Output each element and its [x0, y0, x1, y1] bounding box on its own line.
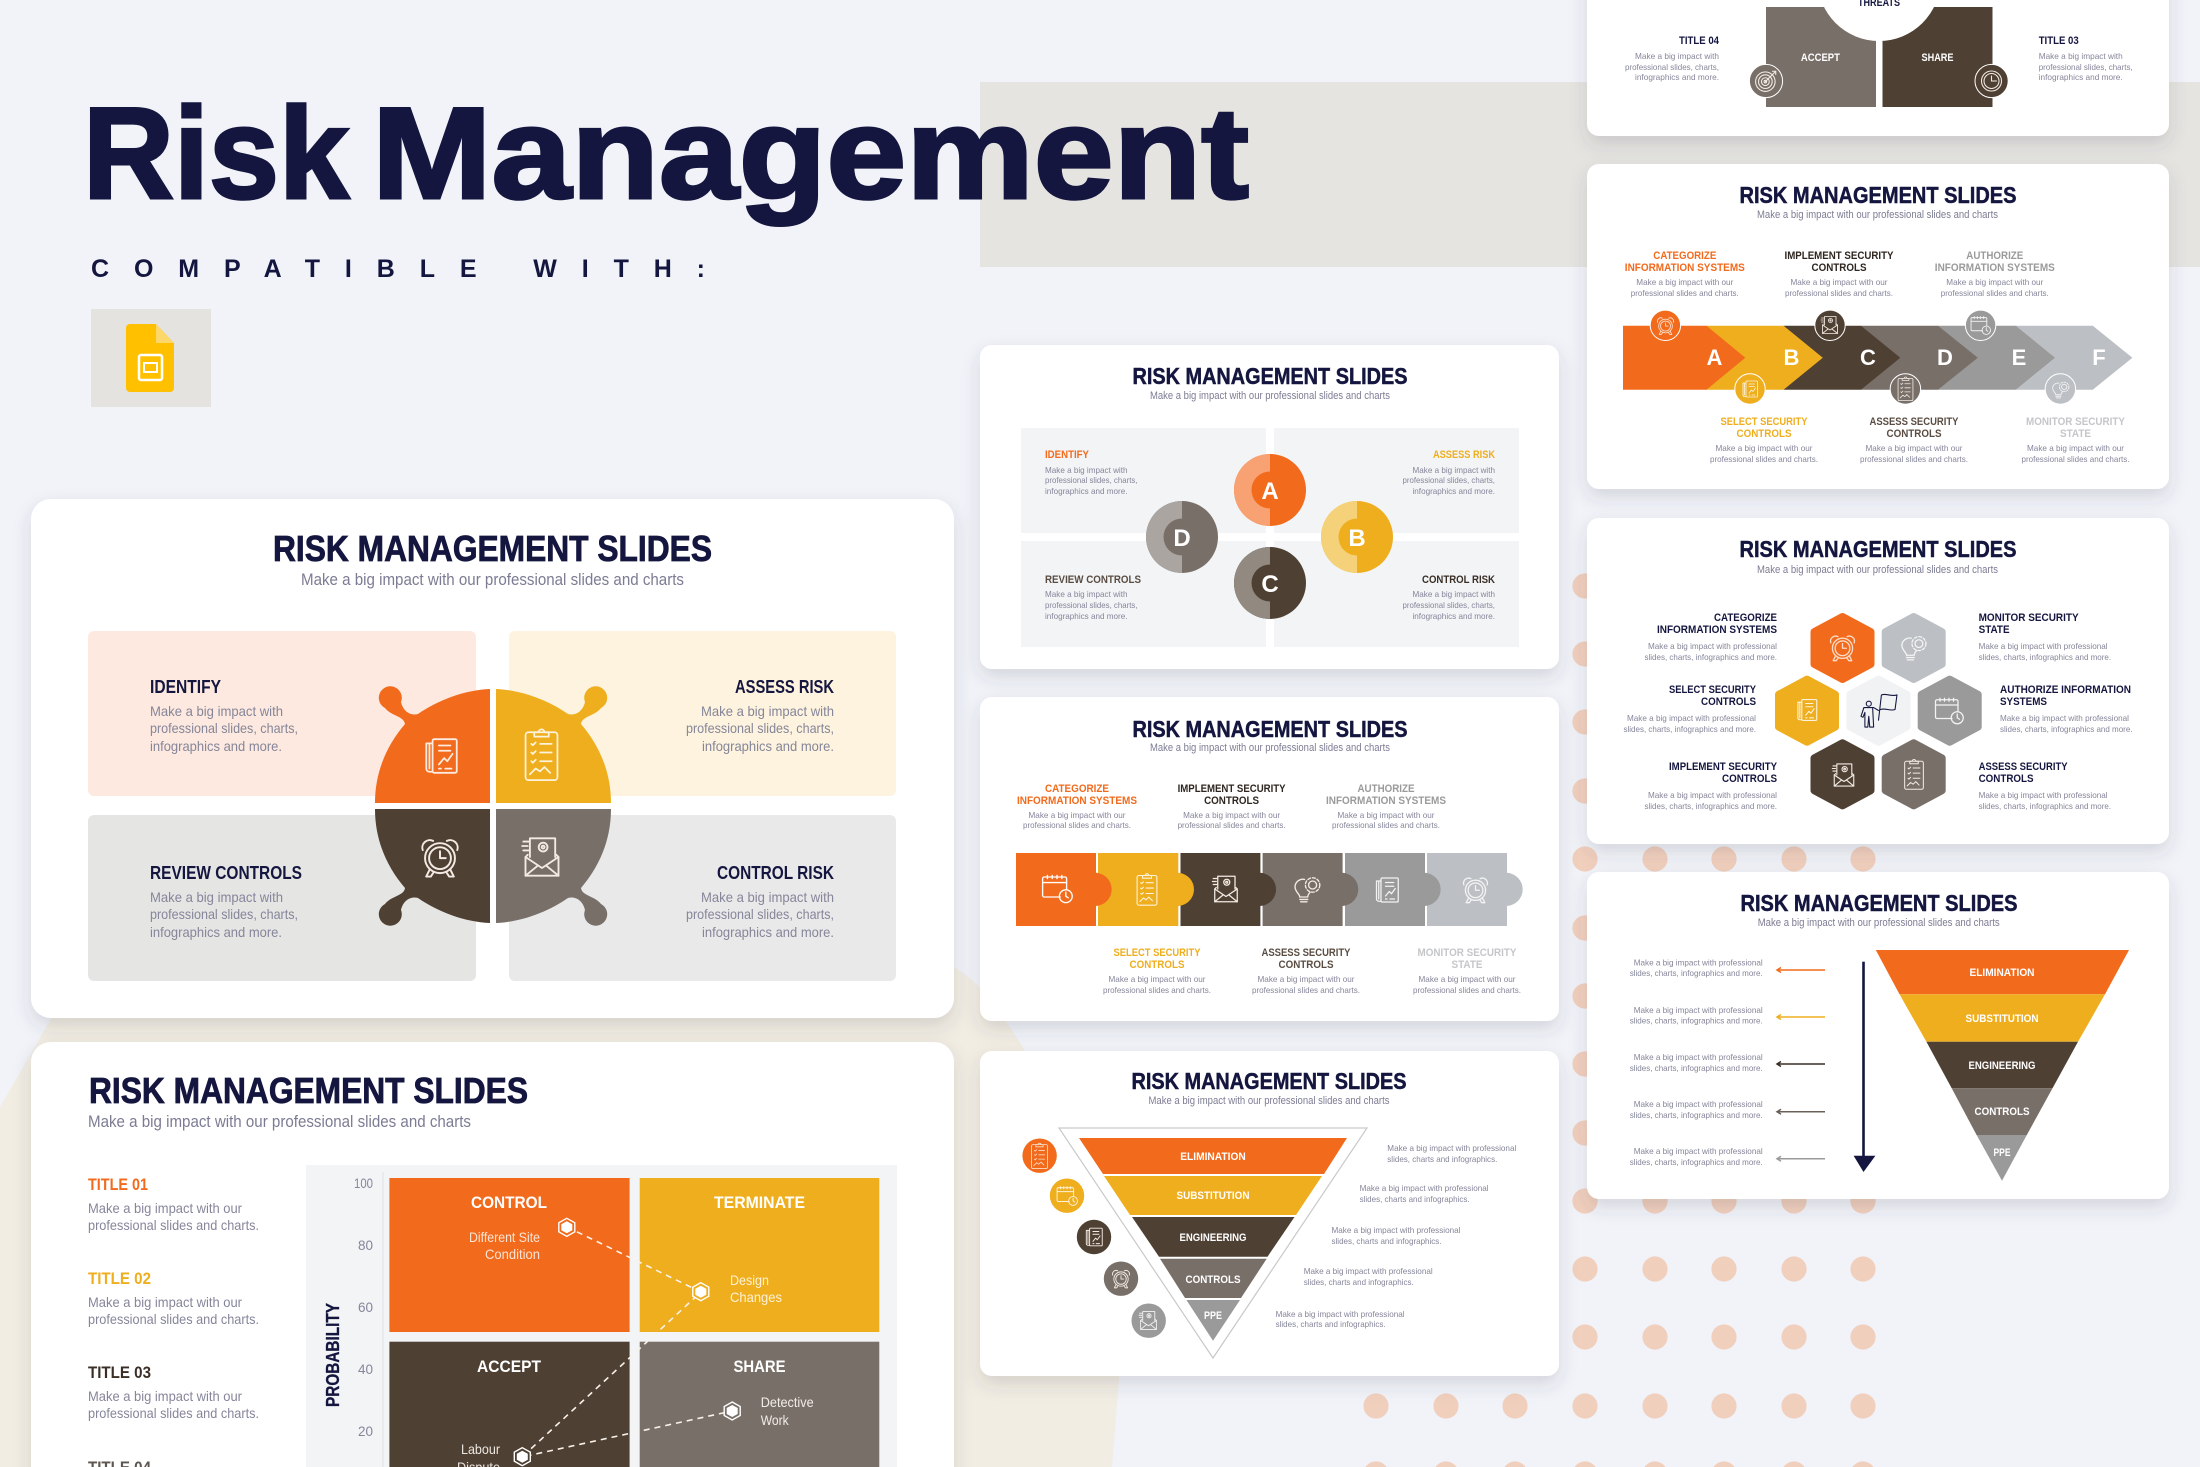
text block: implement	[1644, 761, 1778, 811]
descriptions: Make a big impact with professional	[1276, 1309, 1405, 1319]
text block: select: SELECT SECURITY	[1669, 684, 1757, 696]
text block: control risk: Make a big impact with	[1412, 589, 1495, 599]
y axis labels: 80	[358, 1237, 373, 1253]
descriptions: slides, charts and infographics.	[1276, 1319, 1386, 1329]
chevron arrow chain: C	[1860, 345, 1876, 370]
descriptions: Make a big impact with professional	[1360, 1183, 1489, 1193]
text block: assess: Make a big impact with our	[1258, 974, 1355, 984]
funnel: PPE	[1994, 1147, 2010, 1159]
icon: alarm	[1464, 878, 1487, 903]
inverted pyramid: ELIMINATION	[1180, 1151, 1246, 1163]
text block: control risk: Make a big impact with	[701, 889, 834, 905]
text block: authorize	[2000, 684, 2132, 734]
main title: Risk	[83, 80, 350, 226]
text block: assess risk: Make a big impact with	[701, 703, 834, 719]
text block: assess	[1860, 416, 1968, 464]
text block: title 03: Make a big impact with our	[88, 1388, 242, 1404]
text block: select: Make a big impact with professional	[1627, 713, 1756, 723]
text block: control risk: infographics and more.	[702, 924, 834, 940]
icon: bulb	[1902, 637, 1926, 660]
descriptions: slides, charts and infographics.	[1332, 1236, 1442, 1246]
text block: monitor: professional slides and charts.	[2022, 454, 2130, 464]
text block: review controls: infographics and more.	[1045, 611, 1128, 621]
text block: monitor: Make a big impact with professional	[1979, 641, 2108, 651]
chevron arrow chain: A	[1706, 345, 1722, 370]
quadrant background tiles	[88, 631, 896, 981]
panel: hexagon cluster slide	[1587, 518, 2169, 844]
chevron arrow chain: B	[1784, 345, 1799, 370]
text block: select: Make a big impact with our	[1716, 443, 1813, 453]
quadrant: accept: ACCEPT	[477, 1357, 542, 1376]
quadrant: share	[640, 1342, 879, 1467]
circle A	[1234, 454, 1306, 526]
quadrant: share	[1882, 7, 1992, 107]
text block: implement	[1178, 783, 1286, 830]
arrow: downward priority	[1854, 962, 1875, 1172]
text block: assess risk	[1402, 449, 1495, 496]
chevron arrow chain	[1623, 326, 2132, 390]
circle D: D	[1173, 525, 1191, 552]
icon: calendar	[1936, 698, 1963, 724]
subheading: Make a big impact with our professional slides and charts	[1757, 564, 1998, 576]
quadrant: accept	[389, 1342, 630, 1467]
text block: categorize: professional slides and charts.	[1631, 288, 1739, 298]
heading: RISK MANAGEMENT SLIDES	[1740, 890, 2018, 916]
descriptions: Make a big impact with professional	[1332, 1225, 1461, 1235]
inverted pyramid: SUBSTITUTION	[1176, 1190, 1250, 1202]
text block: authorize	[1326, 783, 1446, 830]
text block: implement: Make a big impact with our	[1790, 277, 1888, 287]
text block: title 01	[88, 1175, 259, 1233]
text block: select: CONTROLS	[1736, 428, 1792, 440]
icon: calendar	[1043, 875, 1072, 903]
text block: title 01: TITLE 01	[88, 1175, 148, 1194]
descriptions: Make a big impact with professional	[1304, 1266, 1433, 1276]
puzzle strip	[1016, 853, 1523, 926]
text block: review controls: REVIEW CONTROLS	[150, 863, 302, 883]
icon: Google Slides	[91, 309, 211, 407]
heading: RISK MANAGEMENT SLIDES	[1740, 536, 2016, 562]
inverted pyramid: ENGINEERING	[1180, 1232, 1246, 1244]
circle B	[1321, 501, 1393, 573]
text block: categorize: INFORMATION SYSTEMS	[1657, 624, 1777, 636]
text block: select	[1624, 684, 1757, 734]
share label: SHARE	[1922, 52, 1954, 64]
heading: RISK MANAGEMENT SLIDES	[1132, 1068, 1406, 1094]
text block: title 02	[88, 1269, 259, 1327]
chevron arrow chain: E	[2012, 345, 2026, 370]
text block: monitor	[1413, 947, 1521, 995]
text block: monitor: MONITOR SECURITY	[1979, 612, 2079, 624]
text block: title 04: infographics and more.	[1635, 72, 1719, 82]
text block: authorize: professional slides and charts.	[1332, 820, 1440, 830]
icon: mail	[522, 838, 558, 876]
descriptions	[1276, 1143, 1516, 1329]
icon: mail	[1212, 876, 1237, 902]
heading: RISK MANAGEMENT SLIDES	[1740, 182, 2016, 208]
descriptions: slides, charts and infographics.	[1304, 1277, 1414, 1287]
heading: RISK MANAGEMENT SLIDES	[89, 1070, 528, 1111]
quadrant: share: Work	[761, 1412, 790, 1428]
text block: categorize: Make a big impact with our	[1636, 277, 1733, 287]
text block: control risk: professional slides, charts,	[686, 906, 834, 922]
heading: RISK MANAGEMENT SLIDES	[273, 528, 712, 569]
quadrant: terminate: Design	[730, 1272, 769, 1288]
chevron icon badges	[1650, 310, 2076, 404]
y axis labels: 100	[354, 1175, 373, 1191]
panel: ABCD circles slide	[980, 345, 1559, 669]
arrows: pointing to descriptions	[1777, 968, 1825, 1161]
text block: assess risk: professional slides, charts,	[1402, 475, 1495, 485]
descriptions: slides, charts, infographics and more.	[1630, 1016, 1763, 1026]
text block: select: slides, charts, infographics and more.	[1624, 724, 1756, 734]
text block: select: professional slides and charts.	[1103, 985, 1211, 995]
circle C	[1234, 547, 1306, 619]
descriptions: Make a big impact with professional	[1634, 1146, 1763, 1156]
text block: select: Make a big impact with our	[1108, 974, 1206, 984]
heading: RISK MANAGEMENT SLIDES	[1132, 716, 1408, 742]
text block: assess risk: ASSESS RISK	[1433, 449, 1495, 461]
text block: select: professional slides and charts.	[1710, 454, 1818, 464]
descriptions: Make a big impact with professional	[1634, 1099, 1763, 1109]
circle A: A	[1261, 478, 1279, 505]
background shape: beige blob	[0, 900, 1119, 1467]
text block: title 03	[2039, 35, 2133, 82]
icon: alarm	[1831, 636, 1854, 661]
descriptions	[1630, 958, 1763, 1167]
panel: four quadrant risk slide	[31, 499, 954, 1018]
text block: implement: CONTROLS	[1812, 262, 1866, 274]
y axis labels	[354, 1175, 373, 1439]
text block: identify: professional slides, charts,	[150, 720, 298, 736]
panel: threats matrix slide (cropped)	[1587, 0, 2169, 136]
text block: authorize: AUTHORIZE INFORMATION	[2000, 684, 2131, 696]
text block: categorize: professional slides and charts.	[1023, 820, 1131, 830]
icon: person with flag	[1861, 694, 1897, 727]
inverted pyramid: CONTROLS	[1186, 1274, 1240, 1286]
text block: control risk: professional slides, charts,	[1402, 600, 1495, 610]
text block: categorize: Make a big impact with our	[1028, 810, 1126, 820]
text block: authorize: SYSTEMS	[2000, 696, 2047, 708]
funnel: ELIMINATION	[1970, 967, 2035, 979]
text block: assess: CONTROLS	[1886, 428, 1942, 440]
text block: assess: CONTROLS	[1278, 959, 1334, 971]
text block: assess risk	[686, 677, 834, 754]
text block: review controls: REVIEW CONTROLS	[1045, 574, 1141, 586]
text block: select: CONTROLS	[1701, 696, 1756, 708]
text block: categorize: CATEGORIZE	[1045, 783, 1109, 795]
quadrant: control: Different Site	[469, 1229, 540, 1245]
text block: review controls: infographics and more.	[150, 924, 282, 940]
text block: implement: slides, charts, infographics and more.	[1644, 801, 1777, 811]
chevron arrow chain: F	[2092, 345, 2106, 370]
panel: probability matrix slide	[31, 1042, 954, 1467]
text block: monitor: Make a big impact with our	[1418, 974, 1516, 984]
text block: authorize	[1935, 250, 2055, 298]
text block: implement: professional slides and charts.	[1785, 288, 1893, 298]
text block: assess: professional slides and charts.	[1252, 985, 1360, 995]
text block: identify: infographics and more.	[1045, 486, 1128, 496]
descriptions: slides, charts, infographics and more.	[1630, 1157, 1763, 1167]
panel: puzzle process slide	[980, 697, 1559, 1021]
text block: categorize: CATEGORIZE	[1653, 250, 1716, 262]
text block: authorize: AUTHORIZE	[1358, 783, 1414, 795]
text block: control risk: infographics and more.	[1412, 611, 1495, 621]
text block: select: SELECT SECURITY	[1114, 947, 1201, 959]
descriptions: Make a big impact with professional	[1387, 1143, 1516, 1153]
text block: authorize: Make a big impact with our	[1946, 277, 2043, 287]
heading: RISK MANAGEMENT SLIDES	[1132, 363, 1408, 389]
text block: title 03: professional slides and charts.	[88, 1405, 259, 1421]
text block: assess: CONTROLS	[1979, 773, 2034, 785]
quadrant: terminate: TERMINATE	[714, 1193, 805, 1212]
text block: categorize: slides, charts, infographics and more.	[1644, 652, 1777, 662]
text block: identify	[1045, 449, 1138, 496]
chevron arrow chain: D	[1937, 345, 1953, 370]
accept label: ACCEPT	[1801, 52, 1840, 64]
funnel: SUBSTITUTION	[1966, 1013, 2039, 1025]
icon: clipboard	[1137, 874, 1157, 905]
text block: assess	[1252, 947, 1360, 995]
descriptions: Make a big impact with professional	[1634, 958, 1763, 968]
descriptions: slides, charts, infographics and more.	[1630, 1063, 1763, 1073]
descriptions: slides, charts, infographics and more.	[1630, 1110, 1763, 1120]
inverted pyramid	[1059, 1128, 1367, 1358]
text block: identify: infographics and more.	[150, 738, 282, 754]
text block: review controls: Make a big impact with	[1045, 589, 1128, 599]
quadrant: accept: Labour	[461, 1441, 500, 1457]
inverted pyramid: PPE	[1204, 1310, 1222, 1322]
text block: title 03: Make a big impact with	[2039, 51, 2123, 61]
subheading: Make a big impact with our professional slides and charts	[88, 1112, 471, 1131]
descriptions: Make a big impact with professional	[1634, 1005, 1763, 1015]
subheading: Make a big impact with our professional slides and charts	[1758, 917, 2000, 929]
text block: title 03: professional slides, charts,	[2039, 62, 2133, 72]
text block: identify: Make a big impact with	[1045, 465, 1128, 475]
text block: title 01: professional slides and charts.	[88, 1217, 259, 1233]
text block: title 01: Make a big impact with our	[88, 1200, 242, 1216]
text block: categorize	[1017, 783, 1137, 830]
panel: chevron process slide	[1587, 164, 2169, 489]
text block: categorize	[1625, 250, 1745, 298]
text block: assess: professional slides and charts.	[1860, 454, 1968, 464]
text block: assess risk: infographics and more.	[1412, 486, 1495, 496]
text block: assess: ASSESS SECURITY	[1870, 416, 1959, 428]
quadrant: share: SHARE	[734, 1357, 786, 1376]
text block: assess: ASSESS SECURITY	[1979, 761, 2068, 773]
marker hexagons	[514, 1218, 740, 1466]
background shape: grey band	[980, 82, 2200, 267]
text block: categorize	[1644, 612, 1777, 662]
quadrant: terminate	[640, 1178, 879, 1332]
text block: implement: professional slides and charts.	[1178, 820, 1286, 830]
text block: implement: CONTROLS	[1722, 773, 1777, 785]
quadrant: share: Detective	[761, 1394, 814, 1410]
icon: mail	[1832, 764, 1854, 786]
text block: authorize: INFORMATION SYSTEMS	[1935, 262, 2055, 274]
dashed connector lines	[522, 1227, 732, 1457]
funnel: ENGINEERING	[1968, 1060, 2036, 1072]
subheading: Make a big impact with our professional slides and charts	[1150, 390, 1390, 402]
text block: title 04	[1625, 35, 1720, 82]
text block: categorize: INFORMATION SYSTEMS	[1017, 795, 1137, 807]
text block: identify: IDENTIFY	[150, 677, 221, 697]
text block: select: CONTROLS	[1130, 959, 1184, 971]
y axis labels: 20	[358, 1423, 373, 1439]
text block: monitor	[2022, 416, 2130, 464]
hexagon cluster	[1779, 617, 1978, 805]
text block: control risk	[686, 863, 834, 940]
descriptions: slides, charts and infographics.	[1387, 1154, 1497, 1164]
descriptions: slides, charts, infographics and more.	[1630, 968, 1763, 978]
circle D	[1146, 501, 1218, 573]
quadrant: control: CONTROL	[471, 1193, 547, 1212]
funnel: CONTROLS	[1974, 1106, 2030, 1118]
text block: title 03: TITLE 03	[2039, 35, 2079, 47]
icon: report	[1798, 700, 1817, 720]
text block: control risk	[1402, 574, 1495, 621]
quadrant: control: Condition	[485, 1246, 540, 1262]
text block: assess risk: ASSESS RISK	[735, 677, 834, 697]
text block: implement: Make a big impact with professional	[1648, 790, 1777, 800]
circle B: B	[1348, 525, 1366, 552]
central four-part blob diagram	[375, 686, 611, 926]
text block: title 04: professional slides, charts,	[1625, 62, 1719, 72]
icon: clock	[1975, 64, 2008, 98]
text block: review controls	[1045, 574, 1141, 621]
text block: authorize: AUTHORIZE	[1966, 250, 2023, 262]
text block: assess: slides, charts, infographics and more.	[1979, 801, 2111, 811]
text block: monitor: slides, charts, infographics and more.	[1979, 652, 2111, 662]
text block: title 04: Make a big impact with	[1635, 51, 1719, 61]
text block: identify: IDENTIFY	[1045, 449, 1090, 461]
icon: clipboard	[1905, 760, 1923, 789]
text block: categorize: CATEGORIZE	[1714, 612, 1777, 624]
text block: monitor: MONITOR SECURITY	[1418, 947, 1517, 959]
text block: assess	[1979, 761, 2111, 811]
subheading: Make a big impact with our professional slides and charts	[1150, 742, 1390, 754]
text block: authorize: slides, charts, infographics and more.	[2000, 724, 2132, 734]
background tiles	[1021, 428, 1519, 647]
text block: categorize: INFORMATION SYSTEMS	[1625, 262, 1745, 274]
icon: clipboard	[526, 729, 557, 780]
text block: title 02: TITLE 02	[88, 1269, 151, 1288]
text block: review controls: professional slides, charts,	[150, 906, 298, 922]
compatible with label: COMPATIBLE WITH:	[91, 255, 705, 283]
icon: alarm clock	[422, 840, 458, 877]
text block: assess risk: Make a big impact with	[1412, 465, 1495, 475]
descriptions: Make a big impact with professional	[1634, 1052, 1763, 1062]
y axis labels: 60	[358, 1299, 373, 1315]
text block: authorize: INFORMATION SYSTEMS	[1326, 795, 1446, 807]
text block: title 03: TITLE 03	[88, 1363, 151, 1382]
y axis labels: 40	[358, 1361, 373, 1377]
risk matrix chart	[306, 1165, 897, 1467]
subheading: Make a big impact with our professional slides and charts	[301, 570, 684, 589]
quadrant: accept	[1766, 7, 1876, 107]
icon circles	[1022, 1138, 1166, 1338]
icon: bulb	[1295, 878, 1320, 902]
text block: authorize: Make a big impact with professional	[2000, 713, 2129, 723]
text block: select	[1103, 947, 1211, 995]
text block: assess: Make a big impact with professional	[1979, 790, 2108, 800]
text block: assess: Make a big impact with our	[1866, 443, 1963, 453]
text block: monitor: STATE	[1979, 624, 2010, 636]
text block: monitor	[1979, 612, 2111, 662]
text block: title 02: Make a big impact with our	[88, 1294, 242, 1310]
text block: implement: CONTROLS	[1204, 795, 1259, 807]
y axis title: PROBABILITY	[323, 1303, 343, 1407]
background dot pattern	[1363, 573, 1876, 1467]
main title: Management	[372, 80, 1249, 226]
icon: report	[1376, 878, 1398, 902]
text block: identify: professional slides, charts,	[1045, 475, 1138, 485]
quadrant: terminate: Changes	[730, 1289, 782, 1305]
icon: target	[1749, 64, 1783, 98]
text block: identify: Make a big impact with	[150, 703, 283, 719]
quadrant: control	[389, 1178, 630, 1332]
text block: implement: IMPLEMENT SECURITY	[1178, 783, 1286, 795]
text block: implement	[1784, 250, 1894, 298]
text block: implement: IMPLEMENT SECURITY	[1669, 761, 1778, 773]
text block: monitor: STATE	[2060, 428, 2091, 440]
text block: monitor: MONITOR SECURITY	[2026, 416, 2126, 428]
text block: monitor: Make a big impact with our	[2027, 443, 2124, 453]
panel: funnel with arrows slide	[1587, 872, 2169, 1199]
text block: title 03: infographics and more.	[2039, 72, 2123, 82]
circle C: C	[1261, 571, 1279, 598]
subheading: Make a big impact with our professional slides and charts	[1757, 209, 1998, 221]
main title	[83, 80, 1249, 226]
text block: select: SELECT SECURITY	[1720, 416, 1808, 428]
text block: assess: ASSESS SECURITY	[1262, 947, 1351, 959]
text block: review controls	[150, 863, 302, 940]
text block: assess risk: professional slides, charts,	[686, 720, 834, 736]
subheading: Make a big impact with our professional slides and charts	[1148, 1095, 1390, 1107]
text block: select	[1710, 416, 1818, 464]
panel: pyramid with icons slide	[980, 1051, 1559, 1376]
text block: review controls: Make a big impact with	[150, 889, 283, 905]
text block: categorize: Make a big impact with professional	[1648, 641, 1777, 651]
descriptions: slides, charts and infographics.	[1360, 1194, 1470, 1204]
text block: control risk: CONTROL RISK	[717, 863, 834, 883]
icon: report	[426, 739, 457, 773]
funnel	[1876, 950, 2129, 1181]
text block: control risk: CONTROL RISK	[1422, 574, 1495, 586]
text block: title 03	[88, 1363, 259, 1421]
text block: authorize: professional slides and charts.	[1941, 288, 2049, 298]
text block: title 04: TITLE 04	[1679, 35, 1720, 47]
text block: review controls: professional slides, charts,	[1045, 600, 1138, 610]
text block: implement: Make a big impact with our	[1183, 810, 1280, 820]
text block: title 02: professional slides and charts.	[88, 1311, 259, 1327]
text block: identify	[150, 677, 298, 754]
text block: implement: IMPLEMENT SECURITY	[1784, 250, 1894, 262]
text block: assess risk: infographics and more.	[702, 738, 834, 754]
text block: monitor: professional slides and charts.	[1413, 985, 1521, 995]
text block: monitor: STATE	[1452, 959, 1482, 971]
threats cutout	[1818, 0, 1940, 41]
text block: authorize: Make a big impact with our	[1338, 810, 1435, 820]
